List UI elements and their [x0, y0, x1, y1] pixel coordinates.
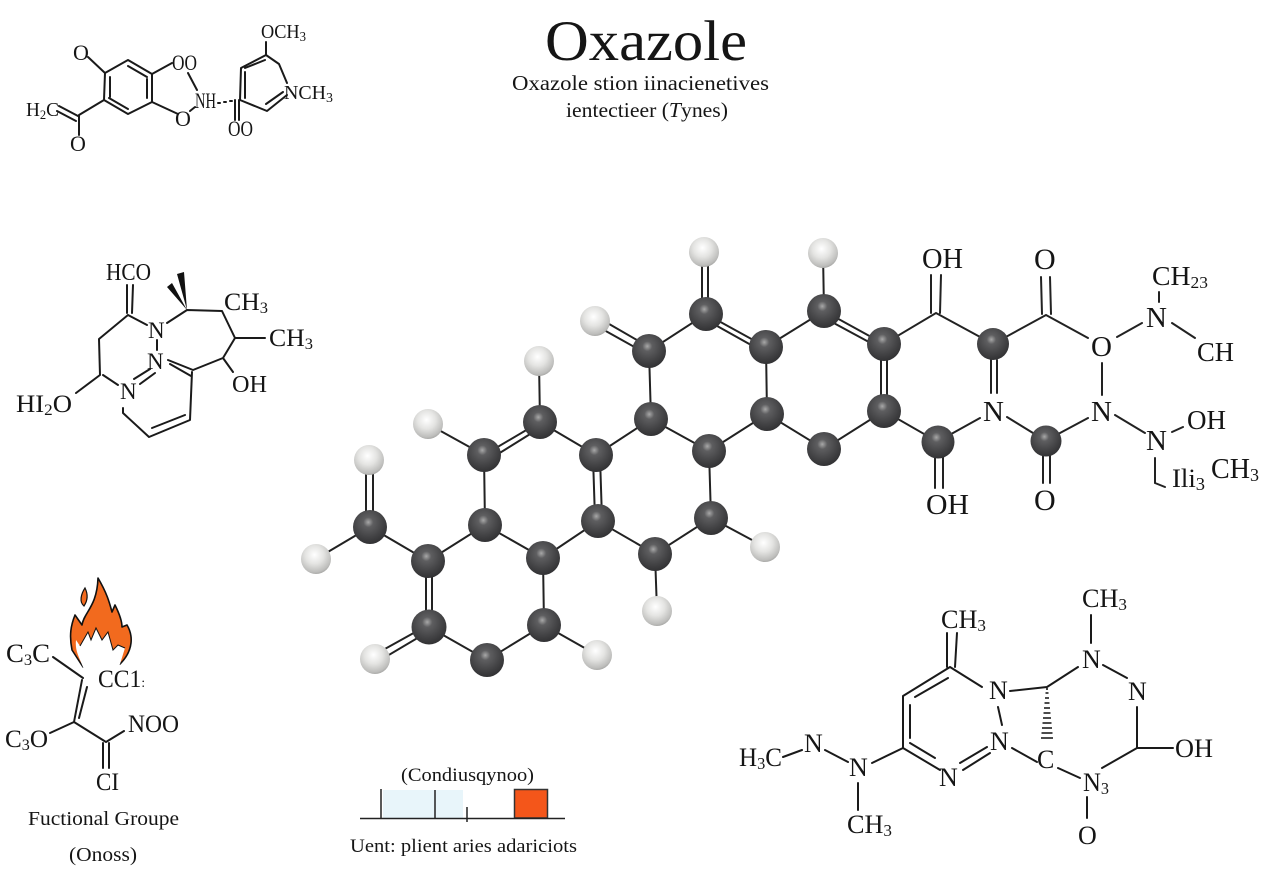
molecule: top left structure: OO	[228, 116, 253, 141]
molecule: bottom right structure: C	[765, 743, 782, 772]
molecule: top left structure: O	[70, 131, 86, 156]
molecule: bottom right structure: N	[1128, 677, 1147, 706]
molecule: top left structure: 3	[300, 30, 306, 45]
molecule: top left structure: NCH	[284, 82, 326, 104]
molecule: flame and functional group	[5, 578, 179, 866]
molecule: bottom right structure: N	[1082, 645, 1101, 674]
atom labels: N	[1146, 425, 1167, 457]
molecule: top left structure: OO	[172, 50, 197, 75]
atom labels: 3	[1250, 465, 1259, 485]
molecule: central ball-and-stick structure	[301, 237, 1259, 677]
molecule: left middle structure: HI	[16, 391, 42, 418]
molecule: top left structure: C	[46, 99, 59, 121]
molecule: bottom right structure: 3	[757, 754, 765, 773]
molecule: top left structure: O	[73, 40, 89, 65]
molecule: bottom right structure: N	[989, 676, 1008, 705]
molecule: top left structure: 3	[326, 91, 333, 106]
molecule: bottom right structure: 3	[883, 821, 892, 840]
molecule: flame and functional group: C	[6, 639, 23, 668]
molecule: bottom right structure: CH	[847, 810, 883, 839]
molecule: flame and functional group: CC1:	[98, 666, 145, 693]
molecule: bottom right structure: N	[849, 753, 868, 782]
caption	[28, 808, 179, 866]
title: Oxazole	[545, 10, 747, 73]
molecule: top left structure: OCH	[261, 21, 303, 43]
molecule: top left structure: 2	[40, 107, 46, 122]
molecule: flame and functional group: C	[32, 639, 50, 668]
molecule: left middle structure: 3	[305, 336, 313, 353]
atom labels: OH	[922, 244, 963, 275]
atom labels: OH	[926, 489, 969, 521]
molecule: bottom right structure: 3	[1101, 779, 1109, 798]
atom labels: 23	[1191, 273, 1208, 292]
caption: (Onoss)	[69, 844, 137, 866]
molecule: bottom right structure: 3	[1118, 595, 1127, 614]
legend: scale bar: (Condiusqynoo)	[401, 765, 534, 786]
molecule: flame and functional group: C	[5, 726, 22, 753]
molecule: top left structure: H	[26, 99, 40, 121]
subtitle	[512, 71, 769, 122]
hydrogen atoms	[301, 237, 838, 674]
molecule: left middle structure: N	[120, 379, 137, 404]
atom labels: Ili	[1172, 464, 1195, 493]
caption: Fuctional Groupe	[28, 808, 179, 830]
atom labels: N	[983, 396, 1004, 428]
molecule: bottom right structure: N	[804, 729, 823, 758]
molecule: flame and functional group: NOO	[128, 711, 179, 738]
legend: scale bar	[350, 765, 577, 857]
icon: flame	[71, 578, 131, 676]
molecule: bottom right structure: N	[1083, 768, 1102, 797]
molecule: flame and functional group: O	[30, 726, 48, 753]
molecule: left middle structure: N	[148, 318, 165, 343]
molecule: top left structure: NH	[195, 88, 216, 113]
molecule: bottom right structure: CH	[1082, 584, 1118, 613]
molecule: left middle structure: CH	[224, 289, 259, 316]
atom labels: O	[1034, 243, 1056, 276]
molecule: bottom right structure: CH	[941, 605, 977, 634]
subtitle: ientectieer (Tynes)	[566, 98, 728, 122]
molecule: left middle structure: 2	[44, 402, 53, 419]
bonds	[316, 252, 1195, 662]
molecule: bottom right structure: O	[1078, 821, 1097, 850]
molecule: bottom right structure: OH	[1175, 734, 1213, 763]
atom labels	[922, 243, 1259, 521]
subtitle: Oxazole stion iinacienetives	[512, 71, 769, 95]
atom labels: 3	[1196, 474, 1205, 494]
atom labels: O	[1034, 484, 1056, 517]
atom labels: N	[1091, 396, 1112, 428]
atom labels: OH	[1187, 405, 1226, 435]
molecule: top left structure: O	[175, 106, 191, 131]
molecule: flame and functional group: 3	[22, 737, 30, 754]
carbon atoms	[353, 294, 1062, 677]
molecule: left middle structure: 3	[260, 300, 268, 317]
molecule: left middle structure: N	[147, 349, 164, 374]
molecule: bottom right structure: C	[1037, 745, 1054, 774]
legend: scale bar: Uent: plient aries adariciots	[350, 836, 577, 857]
molecule: left middle structure: O	[53, 391, 72, 418]
atom labels: N	[1146, 302, 1167, 334]
molecule: left middle structure: OH	[232, 372, 267, 398]
molecule: flame and functional group: 3	[24, 652, 32, 669]
molecule: bottom right structure: N	[990, 727, 1009, 756]
molecule: bottom right structure: 3	[977, 616, 986, 635]
atom labels: CH	[1211, 454, 1250, 485]
molecule: bottom right structure	[739, 584, 1213, 850]
molecule: left middle structure: CH	[269, 325, 304, 352]
molecule: bottom right structure: N	[939, 763, 958, 792]
molecule: left middle structure: HCO	[106, 260, 151, 286]
atom labels: O	[1091, 331, 1112, 363]
atom labels: CH	[1197, 337, 1234, 367]
atom labels: CH	[1152, 261, 1190, 291]
molecule: top left structure	[26, 21, 333, 156]
molecule: left middle structure	[16, 260, 313, 437]
molecule: flame and functional group: CI	[96, 769, 119, 796]
molecule: bottom right structure: H	[739, 743, 758, 772]
